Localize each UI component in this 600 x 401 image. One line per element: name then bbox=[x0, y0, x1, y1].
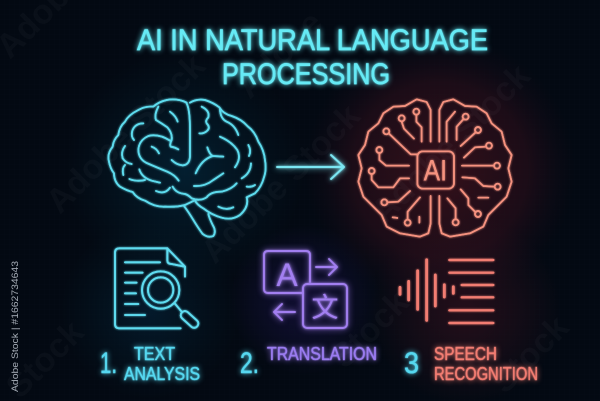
label 3: speech recognition: SPEECH bbox=[434, 343, 497, 364]
icon: document with magnifier bbox=[115, 248, 200, 329]
label 1: text analysis: ANALYSIS bbox=[124, 363, 200, 384]
AI chip bbox=[417, 151, 454, 189]
label 2: translation: 2. bbox=[240, 347, 259, 380]
stock watermark: Stock bbox=[324, 283, 416, 376]
title: PROCESSING bbox=[222, 58, 390, 91]
stock watermark: Adobe Stock bbox=[194, 97, 368, 271]
stock watermark: Adobe Stock bbox=[364, 57, 538, 231]
label 2: translation bbox=[240, 343, 377, 380]
label 1: text analysis: 1. bbox=[100, 347, 117, 380]
label 1: text analysis: TEXT bbox=[134, 343, 175, 364]
icon: AI circuit brain bbox=[358, 99, 512, 237]
icon: blue neon brain bbox=[108, 99, 266, 237]
label 3: speech recognition bbox=[404, 343, 538, 384]
arrow bbox=[277, 155, 344, 179]
label 2: translation: TRANSLATION bbox=[267, 343, 377, 364]
label 3: speech recognition: RECOGNITION bbox=[434, 363, 538, 384]
stock watermark: Adobe bbox=[229, 4, 330, 106]
icon: translation: A bbox=[276, 257, 298, 293]
stock watermark: Stock bbox=[484, 308, 576, 401]
icon: translation: 文 bbox=[312, 293, 338, 323]
circuit traces bbox=[369, 109, 501, 226]
icon: speech waveform bbox=[400, 260, 493, 323]
stock watermark: Adobe Stock bbox=[39, 47, 213, 221]
icon: translation bbox=[264, 251, 347, 328]
vertical stock id: Adobe Stock | #1662734643 bbox=[10, 261, 20, 392]
title bbox=[137, 24, 488, 91]
title: AI IN NATURAL LANGUAGE bbox=[137, 24, 488, 57]
label 3: speech recognition: 3 bbox=[404, 347, 419, 380]
label 1: text analysis bbox=[100, 343, 200, 384]
AI chip: AI bbox=[424, 155, 447, 188]
